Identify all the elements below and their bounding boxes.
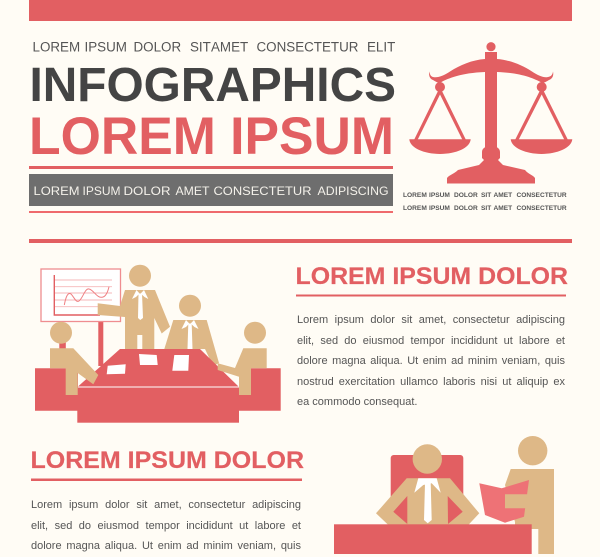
- caption line 2: IPSUM: [429, 205, 450, 212]
- section divider: [29, 239, 572, 243]
- heading text: LOREM IPSUM DOLOR: [30, 447, 304, 474]
- grey subtitle band: ADIPISCING: [318, 184, 388, 198]
- section 2 paragraph: dolore magna aliqua. Ut enim ad minim veniam, quis: [31, 540, 301, 552]
- caption line 2: CONSECTETUR: [516, 205, 567, 212]
- desk: [334, 524, 532, 554]
- caption line 1: AMET: [494, 192, 512, 199]
- open folder: [479, 480, 529, 523]
- header tagline: ELIT: [367, 40, 395, 54]
- conference table: [77, 349, 239, 423]
- caption line 2: SIT: [481, 205, 491, 212]
- presentation board with line chart: [41, 269, 120, 366]
- section 2 paragraph: Lorem ipsum dolor sit amet, consectetur adipiscing: [31, 499, 301, 511]
- header tagline: IPSUM: [84, 40, 127, 54]
- grey subtitle band: LOREM: [34, 184, 80, 198]
- section 2 paragraph: [31, 499, 301, 552]
- section 1 paragraph: elit, sed do eiusmod tempor incididunt ut labore et: [297, 335, 565, 347]
- caption line 1: LOREM: [403, 192, 427, 199]
- title: infographics: INFOGRAPHICS: [30, 58, 396, 112]
- section 1 paragraph: dolore magna aliqua. Ut enim ad minim veniam, quis: [297, 355, 565, 367]
- figure: standing colleague: [164, 295, 219, 366]
- grey subtitle band: IPSUM: [82, 184, 120, 198]
- section 1 paragraph: nostrud exercitation ullamco laboris nisi ut aliquip ex: [297, 376, 565, 388]
- subtitle rule: [29, 211, 393, 213]
- header tagline: CONSECTETUR: [256, 40, 359, 54]
- caption line 1: SIT: [481, 192, 491, 199]
- title rule: [29, 166, 393, 169]
- icon: scales of justice: [409, 42, 572, 183]
- grey subtitle band: CONSECTETUR: [214, 184, 312, 198]
- assistant hand: [505, 494, 527, 508]
- header tagline: DOLOR: [134, 40, 181, 54]
- top banner bar: [29, 0, 572, 21]
- caption line 1: CONSECTETUR: [516, 192, 567, 199]
- heading text: LOREM IPSUM DOLOR: [296, 263, 568, 290]
- section 1 paragraph: ea commodo consequat.: [297, 396, 417, 408]
- caption line 1: IPSUM: [429, 192, 450, 199]
- figure: presenter: [98, 265, 170, 350]
- illustration: meeting around a table: [35, 265, 281, 423]
- papers on table: [107, 354, 189, 374]
- header tagline: SIT: [190, 40, 211, 54]
- illustration: executive at desk with assistant: [334, 436, 554, 554]
- header tagline: LOREM: [32, 40, 80, 54]
- figure: seated right: [218, 322, 267, 395]
- figure: seated left: [50, 322, 98, 395]
- caption line 2: DOLOR: [454, 205, 478, 212]
- caption line 2: LOREM: [403, 205, 427, 212]
- executive chair: [391, 455, 463, 527]
- figure: executive: [376, 444, 479, 525]
- header tagline: AMET: [211, 40, 248, 54]
- caption line 1: DOLOR: [454, 192, 478, 199]
- title: lorem ipsum: LOREM IPSUM: [29, 107, 394, 166]
- caption line 2: AMET: [494, 205, 512, 212]
- figure: assistant: [505, 436, 554, 554]
- header block: [29, 40, 396, 213]
- heading rule: [31, 478, 302, 481]
- section 1 paragraph: Lorem ipsum dolor sit amet, consectetur adipiscing: [297, 314, 565, 326]
- grey subtitle band: AMET: [176, 184, 210, 198]
- heading rule: [296, 294, 566, 296]
- section 2 paragraph: elit, sed do eiusmod tempor incididunt ut labore et: [31, 520, 301, 532]
- scales caption: [403, 192, 567, 212]
- grey subtitle band: DOLOR: [124, 184, 171, 198]
- grey subtitle band: [29, 174, 393, 206]
- section 1 paragraph: [297, 314, 565, 408]
- chairs: [35, 368, 281, 411]
